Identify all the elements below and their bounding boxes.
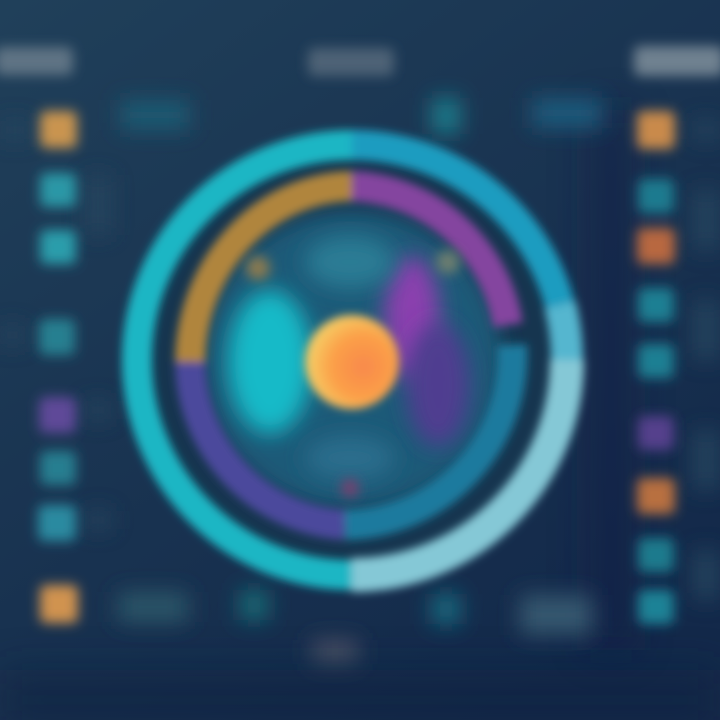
sub-labels near the top xyxy=(120,98,602,134)
left column icons xyxy=(38,111,78,623)
header labels xyxy=(0,46,720,76)
outer ring xyxy=(137,145,567,575)
purple lobe xyxy=(384,256,440,380)
inner backdrop xyxy=(202,210,502,510)
middle ring xyxy=(190,186,512,525)
small marks xyxy=(246,250,460,497)
right column icons xyxy=(637,111,675,624)
bottom vignette xyxy=(0,670,720,720)
side text rows xyxy=(0,120,720,600)
orange core xyxy=(305,315,399,409)
lower purple lobe xyxy=(406,323,470,447)
dial backdrop xyxy=(137,145,567,575)
bottom labels xyxy=(118,590,592,664)
lower dial xyxy=(305,436,395,480)
teal lobe xyxy=(228,290,312,434)
upper dial xyxy=(305,236,395,288)
inner dial xyxy=(202,210,502,510)
right side dark band xyxy=(590,110,632,650)
